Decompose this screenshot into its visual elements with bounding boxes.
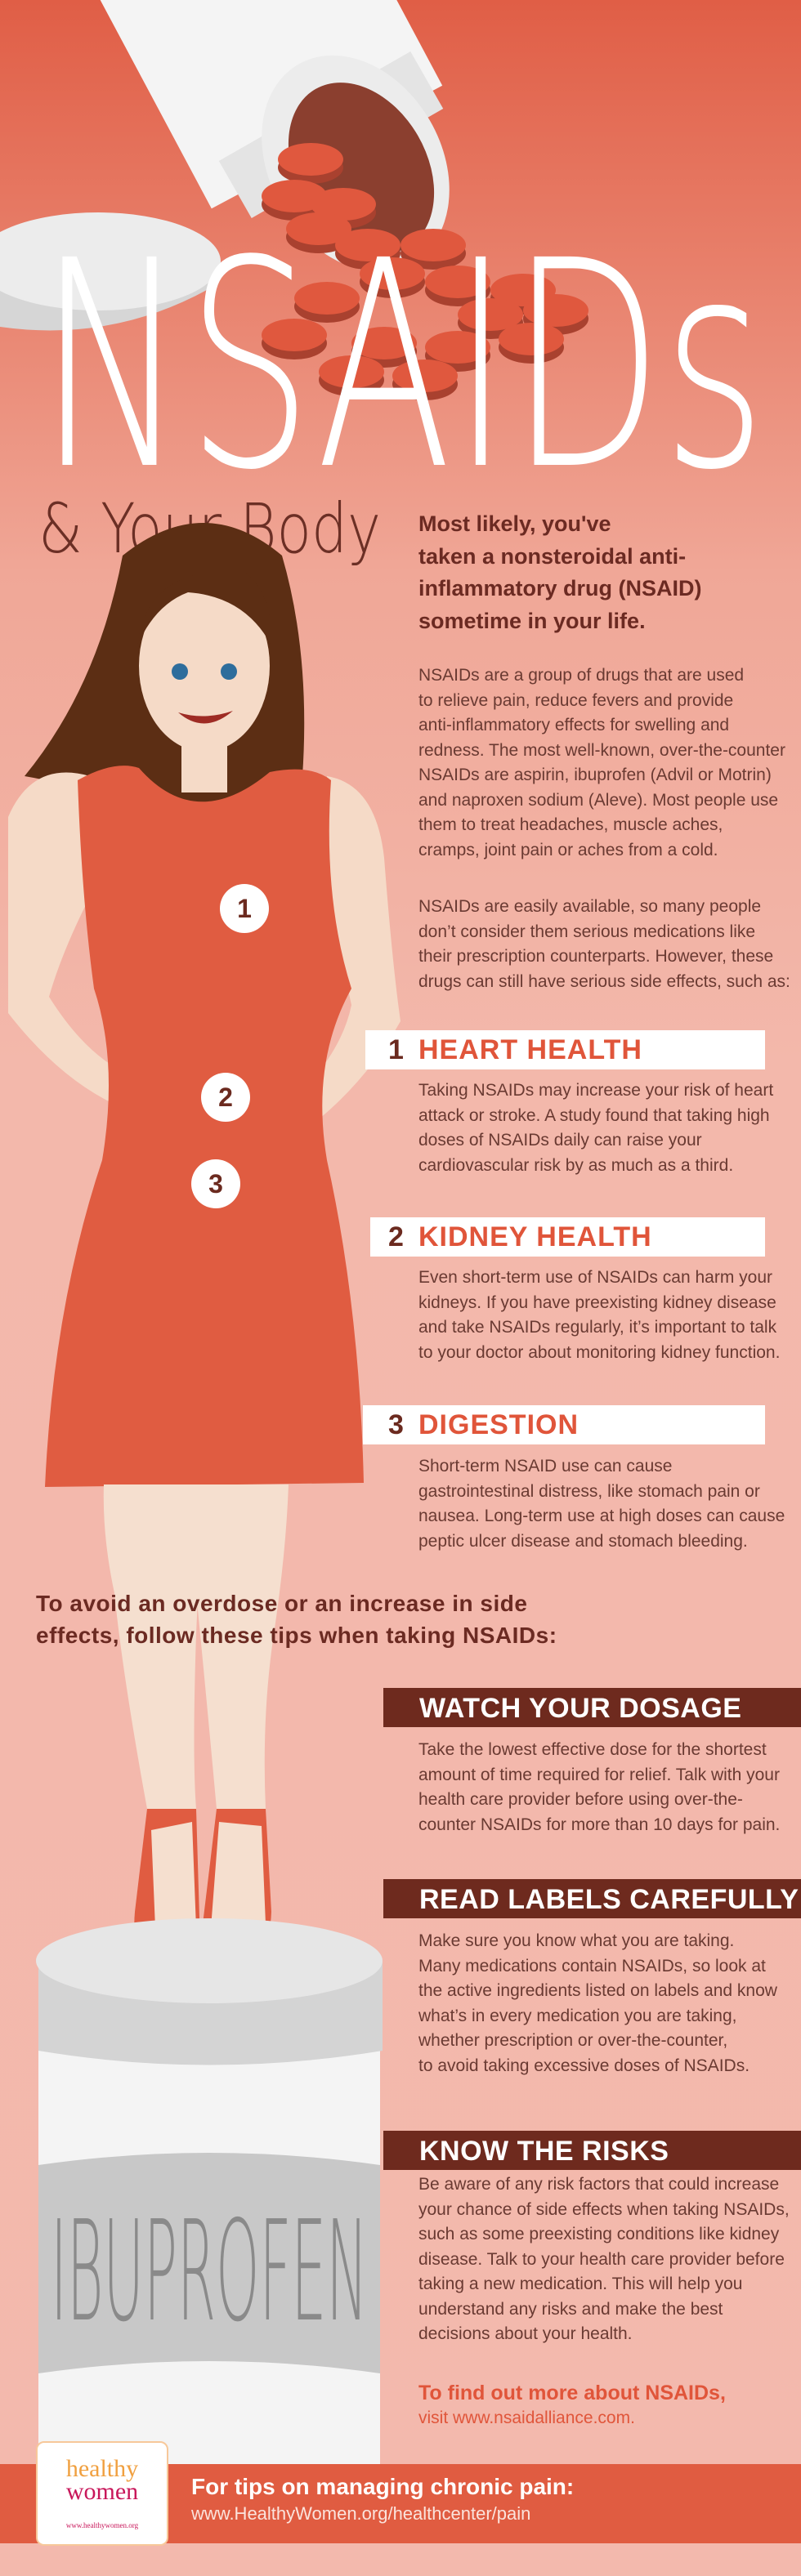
intro paragraph 1: to relieve pain, reduce fevers and provide [418,691,733,709]
text: heart health [418,1081,773,1175]
icon: bottle cap (top) [0,212,221,330]
tip text: labels: what’s in every medication you are taking, [418,2007,736,2025]
heading: 2 kidney health: 2 [388,1221,404,1252]
intro paragraph 1: redness. The most well-known, over-the-counter [418,740,785,760]
intro paragraph 1 [418,666,785,859]
footer text: For tips on managing chronic pain: [191,2474,574,2499]
icon: spilled pills [262,143,588,400]
heading: 2 kidney health: KIDNEY HEALTH [418,1221,652,1252]
footer text [191,2474,574,2524]
intro lead text: sometime in your life. [418,608,646,632]
tip text: risks [418,2175,790,2343]
tip text: risks: taking a new medication. This will help you [418,2275,742,2293]
tips intro heading [36,1591,557,1648]
logo: healthy women: women [66,2478,138,2505]
intro paragraph 2: drugs can still have serious side effects, such as: [418,972,790,990]
heading: 2 kidney health [370,1217,765,1257]
text: heart health: doses of NSAIDs daily can raise your [418,1131,702,1150]
tip text: risks: decisions about your health. [418,2324,633,2343]
intro paragraph 1: NSAIDs are a group of drugs that are used [418,666,744,685]
intro paragraph 1: NSAIDs are aspirin, ibuprofen (Advil or Motrin) [418,766,772,784]
tip heading: watch your dosage [383,1688,801,1727]
tip text: risks: Be aware of any risk factors that could increase [418,2175,779,2194]
text: heart health: cardiovascular risk by as much as a third. [418,1155,733,1175]
tip text: labels: the active ingredients listed on labels and know [418,1981,777,2000]
tip text: labels: whether prescription or over-the-counter, [418,2031,727,2050]
more info callout: To find out more about NSAIDs, [418,2382,726,2404]
tip text: dosage: Take the lowest effective dose for the shortest [418,1740,767,1759]
logo: healthy women [36,2441,168,2546]
marker 1: 1 [237,894,252,923]
figure: woman [8,523,400,1971]
intro lead text [418,511,702,632]
text: kidney health: kidneys. If you have preexisting kidney disease [418,1292,776,1312]
heading: 3 digestion: 3 [388,1409,404,1440]
intro paragraph 2: don’t consider them serious medications like [418,922,755,941]
marker 2 [201,1073,250,1122]
tip heading: know the risks [383,2131,801,2170]
tip text: risks: disease. Talk to your health care provider before [418,2250,785,2268]
marker 3: 3 [208,1169,223,1199]
tip text: risks: your chance of side effects when taking NSAIDs, [418,2199,790,2219]
tip text: risks: understand any risks and make the best [418,2299,723,2319]
text: kidney health: to your doctor about monitoring kidney function. [418,1343,780,1361]
intro paragraph 1: them to treat headaches, muscle aches, [418,815,723,834]
heading: 1 heart health: 1 [388,1034,404,1065]
tip heading: read labels carefully: READ LABELS CAREFULLY [419,1884,799,1915]
number markers on dress [191,884,269,1208]
tip heading: watch your dosage: WATCH YOUR DOSAGE [419,1693,742,1724]
intro paragraph 1: and naproxen sodium (Aleve). Most people use [418,791,778,809]
more info callout [418,2382,726,2427]
text: heart health: Taking NSAIDs may increase your risk of heart [418,1081,773,1100]
tips intro heading: effects, follow these tips when taking NSAIDs: [36,1623,557,1648]
footer bar [0,2464,801,2543]
tip text: dosage [418,1740,780,1833]
intro lead text: inflammatory drug (NSAID) [418,576,702,600]
text: digestion: nausea. Long-term use at high doses can cause [418,1507,785,1525]
intro lead text: Most likely, you've [418,511,611,536]
heading: 3 digestion: DIGESTION [418,1409,579,1440]
tip text: risks: such as some preexisting conditions like kidney [418,2225,779,2243]
intro lead text: taken a nonsteroidal anti- [418,544,686,569]
text: kidney health: and take NSAIDs regularly, it’s important to talk [418,1318,776,1337]
tip text: dosage: health care provider before using over-the- [418,1790,743,1809]
text: digestion: gastrointestinal distress, like stomach pain or [418,1482,760,1500]
text: kidney health: Even short-term use of NSAIDs can harm your [418,1268,772,1287]
marker 3 [191,1159,240,1208]
intro paragraph 1: cramps, joint pain or aches from a cold. [418,840,718,859]
intro paragraph 2: their prescription counterparts. However, these [418,947,773,966]
icon: tipped pill bottle [196,0,487,306]
text: kidney health [418,1268,780,1361]
logo: healthy women: www.healthywomen.org [66,2521,138,2529]
marker 1 [220,884,269,933]
heading: 1 heart health: HEART HEALTH [418,1034,642,1065]
tip heading: know the risks: KNOW THE RISKS [419,2136,669,2167]
text: digestion [418,1457,785,1551]
icon: ibuprofen bottle [36,1918,383,2467]
tip text: labels: Make sure you know what you are taking. [418,1931,734,1950]
tip text: dosage: counter NSAIDs for more than 10 days for pain. [418,1815,780,1833]
text: digestion: peptic ulcer disease and stomach bleeding. [418,1531,748,1551]
tip text: dosage: amount of time required for relief. Talk with your [418,1765,780,1784]
tip text: labels: to avoid taking excessive doses of NSAIDs. [418,2056,750,2075]
heading: 1 heart health [365,1030,765,1069]
intro paragraph 1: anti-inflammatory effects for swelling and [418,716,729,734]
logo: healthy women: healthy [66,2455,138,2482]
intro paragraph 2: NSAIDs are easily available, so many people [418,897,761,916]
text: heart health: attack or stroke. A study found that taking high [418,1106,770,1124]
intro paragraph 2 [418,897,790,990]
tips intro heading: To avoid an overdose or an increase in side [36,1591,527,1616]
tip text: labels: Many medications contain NSAIDs, so look at [418,1956,766,1976]
subtitle: & Your Body: & Your Body [38,489,381,569]
tip text: labels [418,1931,777,2075]
marker 2: 2 [218,1083,233,1112]
heading: 3 digestion [363,1405,765,1444]
text: digestion: Short-term NSAID use can cause [418,1457,672,1476]
more info callout: visit www.nsaidalliance.com. [418,2409,635,2427]
footer text: www.HealthyWomen.org/healthcenter/pain [191,2503,530,2524]
